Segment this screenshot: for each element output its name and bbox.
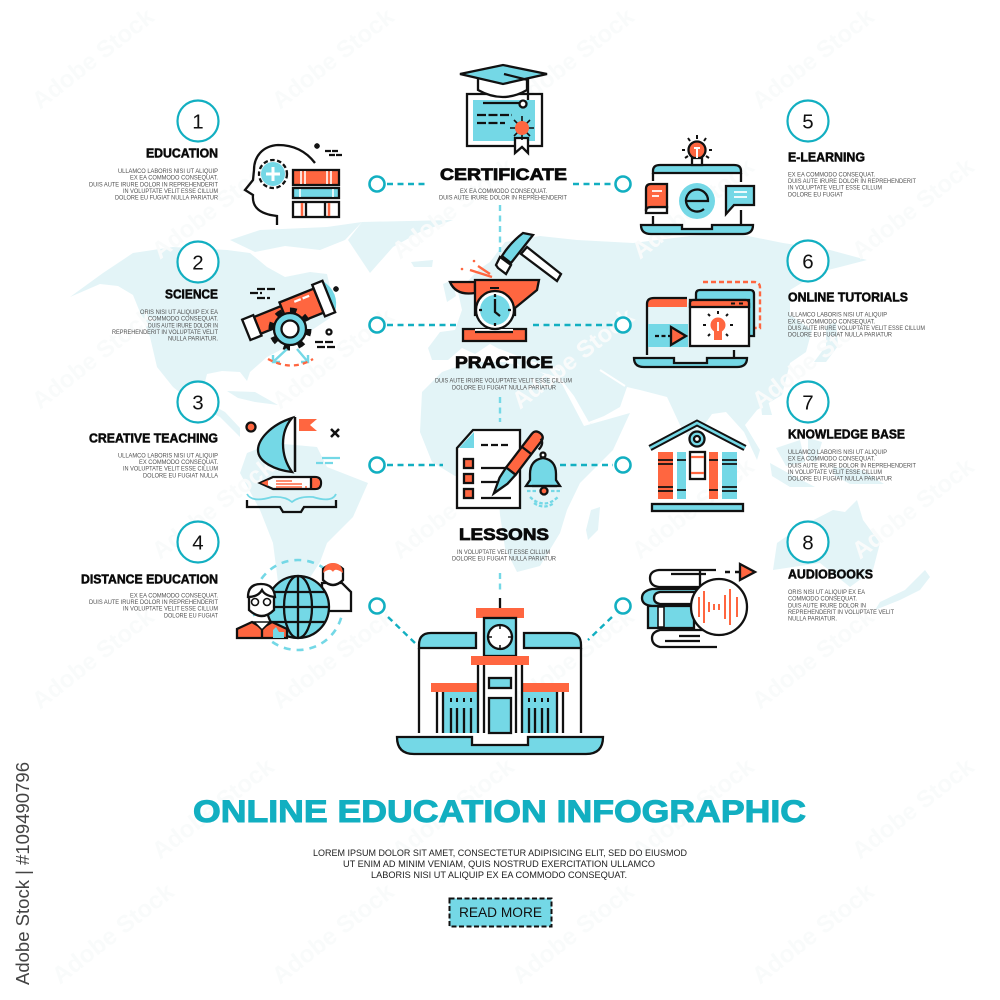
read more button — [450, 898, 552, 926]
panel: 1 education: EDUCATION — [146, 146, 218, 160]
heading and icon: practice — [435, 233, 572, 391]
text: Adobe Stock — [267, 303, 400, 415]
panel: 5 e-learning: 5 — [802, 110, 814, 134]
panel: 6 online tutorials — [788, 240, 925, 339]
text: Adobe Stock — [147, 753, 280, 865]
world map background — [70, 220, 930, 622]
text: Adobe Stock — [47, 878, 180, 990]
description text — [313, 848, 687, 880]
text: Adobe Stock — [27, 3, 160, 115]
connector lines and nodes — [370, 176, 630, 643]
text: Adobe Stock — [147, 453, 280, 565]
panel: 2 science: DUIS AUTE IRURE DOLOR IN — [148, 322, 218, 329]
panel: 1 education: DOLORE EU FUGIAT NULLA PARIATUR — [115, 195, 218, 202]
text: Adobe Stock — [387, 453, 520, 565]
panel: 5 e-learning: IN VOLUPTATE VELIT ESSE CILLUM — [788, 185, 882, 192]
icon: school in laptop — [397, 598, 603, 754]
heading and icon: lessons: LESSONS — [459, 525, 549, 544]
heading and icon: practice: DUIS AUTE IRURE VOLUPTATE VELIT ESSE CILLUM — [435, 377, 572, 384]
icon: stack of books with sound wave — [642, 564, 755, 647]
text: Adobe Stock — [627, 153, 760, 265]
heading and icon: practice: PRACTICE — [455, 353, 553, 372]
text: Adobe Stock — [507, 303, 640, 415]
heading and icon: lessons: DOLORE EU FUGIAT NULLA PARIATUR — [452, 556, 556, 563]
panel: 6 online tutorials: DUIS AUTE IRURE VOLUPTATE VELIT ESSE CILLUM — [788, 325, 925, 332]
panel: 4 distance education: DUIS AUTE IRURE DOLOR IN REPREHENDERIT — [89, 599, 218, 606]
icon: library building — [650, 423, 745, 511]
panel: 4 distance education: IN VOLUPTATE VELIT ESSE CILLUM — [123, 606, 218, 613]
panel: 6 online tutorials: 6 — [802, 250, 814, 274]
panel: 5 e-learning — [788, 100, 916, 198]
panel: 6 online tutorials: EX EA COMMODO CONSEQUAT. — [788, 318, 875, 325]
text: Adobe Stock — [507, 603, 640, 715]
panel: 8 audiobooks: 8 — [802, 532, 814, 554]
text: Adobe Stock — [747, 878, 880, 990]
panel: 6 online tutorials: ONLINE TUTORIALS — [788, 290, 908, 304]
panel: 8 audiobooks: DUIS AUTE IRURE DOLOR IN — [788, 602, 866, 609]
panel: 8 audiobooks — [788, 522, 894, 623]
panel: 7 knowledge base: 7 — [802, 392, 814, 414]
read more button: READ MORE — [459, 904, 542, 920]
text: Adobe Stock — [387, 153, 520, 265]
text: Adobe Stock — [747, 603, 880, 715]
panel: 2 science: ORIS NISI UT ALIQUIP EX EA — [140, 309, 219, 316]
text: Adobe Stock — [627, 453, 760, 565]
text: Adobe Stock — [847, 153, 980, 265]
panel: 3 creative teaching: ULLAMCO LABORIS NISI UT ALIQUIP — [118, 452, 218, 459]
panel: 1 education: IN VOLUPTATE VELIT ESSE CILLUM — [123, 188, 218, 195]
description text: UT ENIM AD MINIM VENIAM, QUIS NOSTRUD EXERCITATION ULLAMCO — [343, 859, 655, 869]
side credit: Adobe Stock | #109490796 — [12, 762, 33, 985]
panel: 7 knowledge base: IN VOLUPTATE VELIT ESSE CILLUM — [788, 469, 882, 476]
heading and icon: lessons — [452, 429, 561, 563]
panel: 8 audiobooks: REPREHENDERIT IN VOLUPTATE VELIT — [788, 609, 894, 616]
heading and icon: certificate: EX EA COMMODO CONSEQUAT. — [460, 188, 547, 195]
panel: 3 creative teaching: IN VOLUPTATE VELIT ESSE CILLUM — [123, 466, 218, 473]
panel: 2 science: 2 — [192, 252, 204, 274]
text: Adobe Stock — [27, 303, 160, 415]
panel: 2 science: REPREHENDERIT IN VOLUPTATE VELIT — [112, 329, 218, 336]
panel: 7 knowledge base: ULLAMCO LABORIS NISI UT ALIQUIP — [788, 449, 887, 456]
heading and icon: lessons: IN VOLUPTATE VELIT ESSE CILLUM — [457, 549, 550, 556]
text: Adobe Stock — [507, 878, 640, 990]
panel: 3 creative teaching: 3 — [192, 392, 204, 414]
text: Adobe Stock — [27, 603, 160, 715]
panel: 3 creative teaching: CREATIVE TEACHING — [89, 432, 218, 446]
icon: globe with people — [237, 560, 351, 650]
panel: 4 distance education: EX EA COMMODO CONSEQUAT. — [130, 592, 218, 599]
panel: 3 creative teaching: EX COMMODO CONSEQUAT. — [139, 459, 218, 466]
panel: 5 e-learning: DOLORE EU FUGIAT — [788, 191, 843, 198]
heading and icon: practice: DOLORE EU FUGIAT NULLA PARIATUR — [452, 384, 556, 391]
panel: 8 audiobooks: COMMODO CONSEQUAT. — [788, 596, 857, 603]
panel: 2 science: SCIENCE — [165, 288, 218, 302]
text: Adobe Stock — [507, 3, 640, 115]
text: Adobe Stock — [147, 153, 280, 265]
panel: 4 distance education — [81, 522, 218, 619]
panel: 5 e-learning: EX EA COMMODO CONSEQUAT. — [788, 171, 875, 178]
panel: 6 online tutorials: ULLAMCO LABORIS NISI UT ALIQUIP — [788, 312, 887, 319]
panel: 4 distance education: DISTANCE EDUCATION — [81, 572, 218, 586]
text: Adobe Stock — [747, 3, 880, 115]
panel: 1 education — [89, 100, 218, 202]
panel: 8 audiobooks: ORIS NISI UT ALIQUIP EX EA — [788, 589, 866, 596]
panel: 7 knowledge base: DOLORE EU FUGIAT NULLA PARIATUR — [788, 476, 892, 483]
title: ONLINE EDUCATION INFOGRAPHIC — [193, 793, 806, 829]
icon: head with books — [245, 143, 343, 225]
heading and icon: certificate — [439, 65, 567, 202]
description text: LOREM IPSUM DOLOR SIT AMET, CONSECTETUR ADIPISICING ELIT, SED DO EIUSMOD — [313, 848, 687, 858]
text: Adobe Stock — [847, 453, 980, 565]
text: Adobe Stock — [747, 303, 880, 415]
panel: 2 science: NULLA PARIATUR. — [168, 336, 218, 343]
panel: 3 creative teaching: DOLORE EU FUGIAT NULLA — [143, 472, 219, 479]
text: Adobe Stock — [627, 753, 760, 865]
panel: 8 audiobooks: NULLA PARIATUR. — [788, 616, 837, 623]
text: Adobe Stock — [267, 878, 400, 990]
text: Adobe Stock — [847, 753, 980, 865]
panel: 5 e-learning: DUIS AUTE IRURE DOLOR IN REPREHENDERIT — [788, 178, 916, 185]
text: Adobe Stock — [267, 603, 400, 715]
panel: 4 distance education: 4 — [192, 532, 204, 554]
panel: 2 science — [112, 242, 219, 343]
icon: sailboat pencil and book — [246, 417, 340, 512]
heading and icon: certificate: DUIS AUTE IRURE DOLOR IN REPREHENDERIT — [439, 195, 567, 202]
panel: 3 creative teaching — [89, 382, 219, 479]
panel: 4 distance education: DOLORE EU FUGIAT — [164, 612, 218, 619]
panel: 7 knowledge base: KNOWLEDGE BASE — [788, 428, 905, 442]
panel: 1 education: 1 — [192, 110, 204, 134]
panel: 8 audiobooks: AUDIOBOOKS — [788, 568, 873, 582]
panel: 6 online tutorials: DOLORE EU FUGIAT NULLA PARIATUR — [788, 332, 892, 339]
panel: 7 knowledge base: DUIS AUTE IRURE DOLOR IN REPREHENDERIT — [788, 462, 916, 469]
panel: 7 knowledge base: EX EA COMMODO CONSEQUAT. — [788, 456, 875, 463]
description text: LABORIS NISI UT ALIQUIP EX EA COMMODO CONSEQUAT. — [371, 870, 627, 880]
heading and icon: certificate: CERTIFICATE — [440, 165, 567, 184]
icon: telescope with gear — [240, 279, 341, 366]
text: Adobe Stock — [387, 753, 520, 865]
panel: 1 education: ULLAMCO LABORIS NISI UT ALIQUIP — [118, 168, 218, 175]
panel: 2 science: COMMODO CONSEQUAT. — [148, 316, 218, 323]
panel: 5 e-learning: E-LEARNING — [788, 150, 865, 164]
panel: 7 knowledge base — [788, 382, 916, 483]
panel: 1 education: DUIS AUTE IRURE DOLOR IN REPREHENDERIT — [89, 181, 218, 188]
icon: online tutorials laptop — [634, 282, 760, 367]
panel: 1 education: EX EA COMMODO CONSEQUAT. — [130, 175, 218, 182]
icon: e-learning laptop — [641, 135, 754, 234]
text: Adobe Stock — [267, 3, 400, 115]
